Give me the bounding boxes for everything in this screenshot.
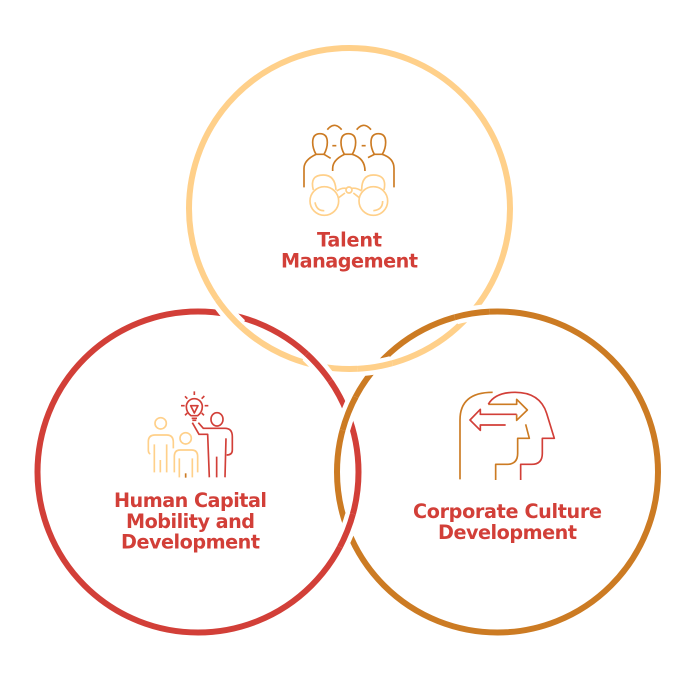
heading: corporate culture development: [413, 500, 602, 544]
icon: heads with exchange arrows: [460, 392, 554, 480]
ring: talent management: [189, 48, 510, 369]
heading: talent management: Talent: [317, 228, 382, 252]
icon: people with lightbulb: [148, 391, 232, 478]
heading: human capital mobility and development: Development: [121, 530, 260, 554]
heading: corporate culture development: Corporate Culture: [413, 500, 602, 523]
ring weave: crossing overlaps: [215, 298, 490, 548]
ring: human capital mobility: [38, 312, 358, 632]
heading: talent management: Management: [281, 250, 418, 272]
heading: human capital mobility and development: [114, 489, 267, 554]
heading: human capital mobility and development: Human Capital: [114, 489, 267, 512]
icon: team with binoculars: [304, 125, 394, 215]
heading: corporate culture development: Development: [438, 521, 577, 544]
ring: corporate culture: [337, 312, 658, 632]
heading: talent management: [281, 228, 418, 272]
heading: human capital mobility and development: Mobility and: [126, 510, 255, 533]
